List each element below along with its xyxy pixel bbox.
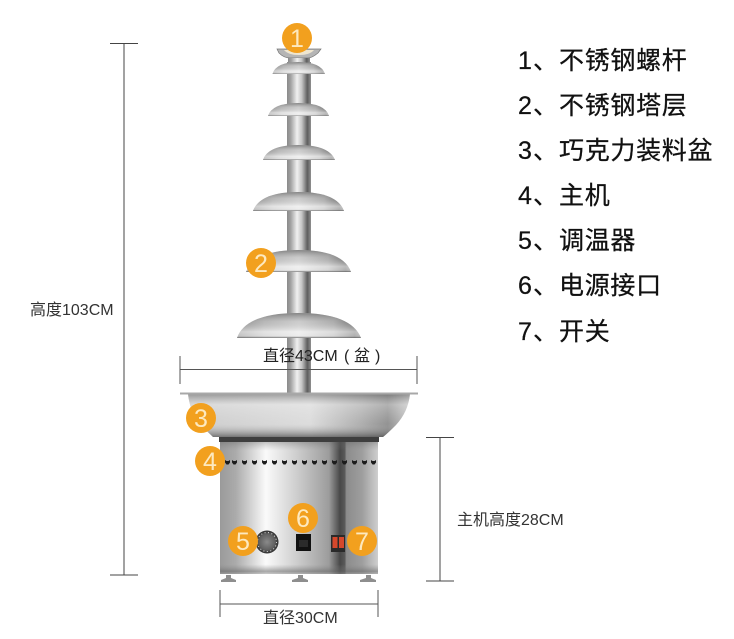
tier 2 (268, 103, 329, 116)
badge 7 (347, 526, 377, 556)
stainless steel cup top (277, 49, 321, 63)
badge 7: 7 (355, 528, 369, 556)
badge 2: 2 (254, 250, 268, 278)
main unit body (219, 437, 379, 582)
dimension: main unit height: 主机高度28CM (457, 511, 564, 529)
badge 6 (288, 503, 318, 533)
badge 5 (228, 526, 258, 556)
item 2: 2 (518, 92, 532, 120)
item 6: 电源接口 (559, 272, 662, 300)
item 4: 主机 (559, 182, 610, 210)
dimension: basin diameter: 直径43CM (263, 347, 338, 365)
item 6: 、 (533, 272, 558, 300)
dimension: total height: 高度103CM (30, 301, 114, 319)
badge 2 (246, 248, 276, 278)
tier 3 (263, 145, 335, 160)
badge 6: 6 (296, 505, 310, 533)
dimension: basin diameter: ) (375, 348, 380, 365)
item 7: 开关 (559, 318, 610, 346)
dimension: basin diameter: 盆 (354, 347, 370, 365)
central pole (287, 62, 311, 394)
dimension: main unit height (426, 438, 564, 581)
item 7: 、 (533, 318, 558, 346)
item 5: 调温器 (559, 227, 636, 255)
dimension: total height (30, 44, 138, 575)
tier 1 (272, 62, 325, 74)
item 5: 、 (533, 227, 558, 255)
item 3: 、 (533, 137, 558, 165)
badge 5: 5 (236, 528, 250, 556)
item 7: 7 (518, 318, 532, 346)
parts list (518, 47, 713, 346)
item 6: 6 (518, 272, 532, 300)
badge 1 (282, 23, 312, 53)
dimension: base diameter (220, 590, 378, 627)
item 2: 不锈钢塔层 (559, 92, 688, 120)
item 3: 3 (518, 137, 532, 165)
fountain tower (237, 49, 361, 394)
item 4: 、 (533, 182, 558, 210)
badge 3: 3 (194, 405, 208, 433)
basin rim (180, 392, 418, 394)
badge 3 (186, 403, 216, 433)
item 1: 1 (518, 47, 532, 75)
badge 1: 1 (290, 25, 304, 53)
thermostat dial (256, 530, 278, 554)
dimension: basin diameter (180, 347, 417, 384)
item 4: 4 (518, 182, 532, 210)
power switch (331, 535, 345, 552)
chocolate basin (180, 392, 418, 437)
item 1: 、 (533, 47, 558, 75)
feet (221, 575, 376, 582)
item 5: 5 (518, 227, 532, 255)
dark collar band (219, 437, 379, 442)
vent holes (225, 460, 376, 464)
tier 5 (246, 250, 351, 272)
badge 4 (195, 446, 225, 476)
power socket (296, 534, 311, 551)
dimension: base diameter: 直径30CM (263, 609, 338, 627)
item 3: 巧克力装料盆 (559, 137, 713, 165)
tier 6 (237, 313, 361, 338)
item 2: 、 (533, 92, 558, 120)
badge 4: 4 (203, 448, 217, 476)
tier 4 (253, 192, 344, 211)
item 1: 不锈钢螺杆 (559, 47, 688, 75)
dimension: basin diameter: ( (344, 348, 350, 365)
